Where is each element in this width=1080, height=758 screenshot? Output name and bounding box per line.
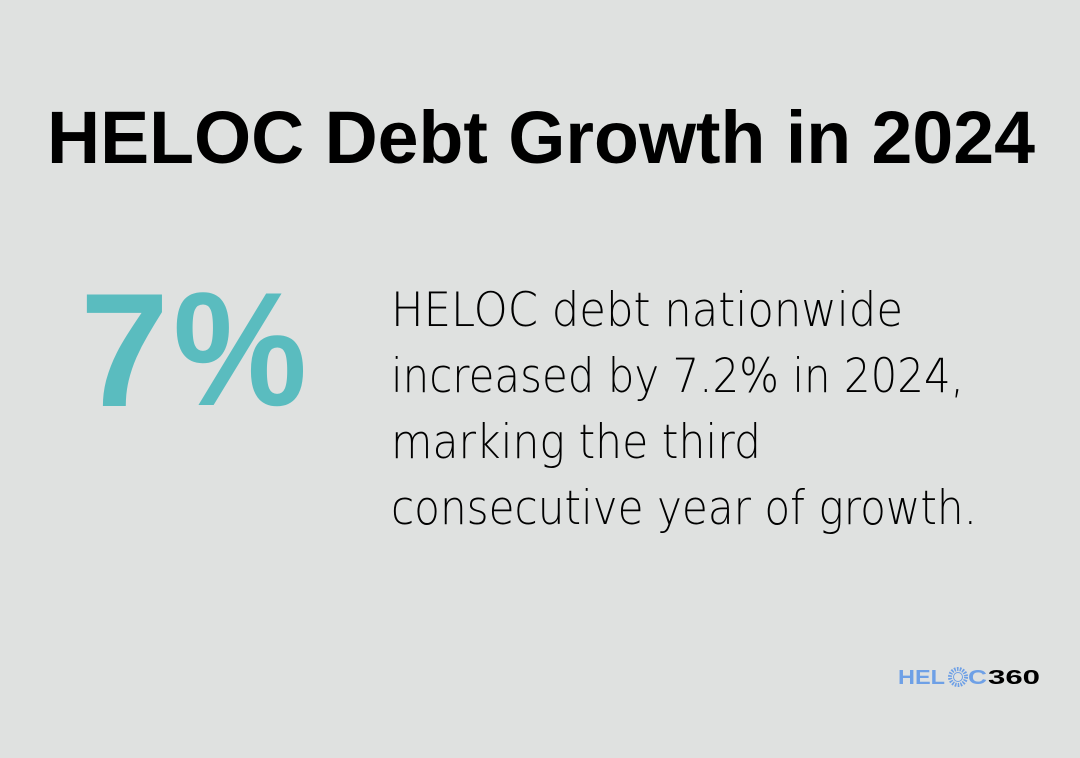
description text: increased by 7.2% in 2024, [391,349,964,404]
description text: HELOC debt nationwide [391,283,903,338]
big stat: 7%: % [173,259,307,440]
logo digits: 360: 360 [988,667,1040,689]
description text: marking the third [391,415,761,470]
big stat: 7%: 7 [80,260,169,441]
description text [391,283,977,536]
description text: consecutive year of growth. [391,481,977,536]
logo letters: HEL: HEL [898,667,945,689]
title: HELOC Debt Growth in 2024 [47,96,1035,179]
icon: logo spiral [950,669,966,685]
logo: HELOC360 [898,667,1040,689]
logo letter: C: C [968,667,987,689]
big stat: 7% [80,259,307,441]
